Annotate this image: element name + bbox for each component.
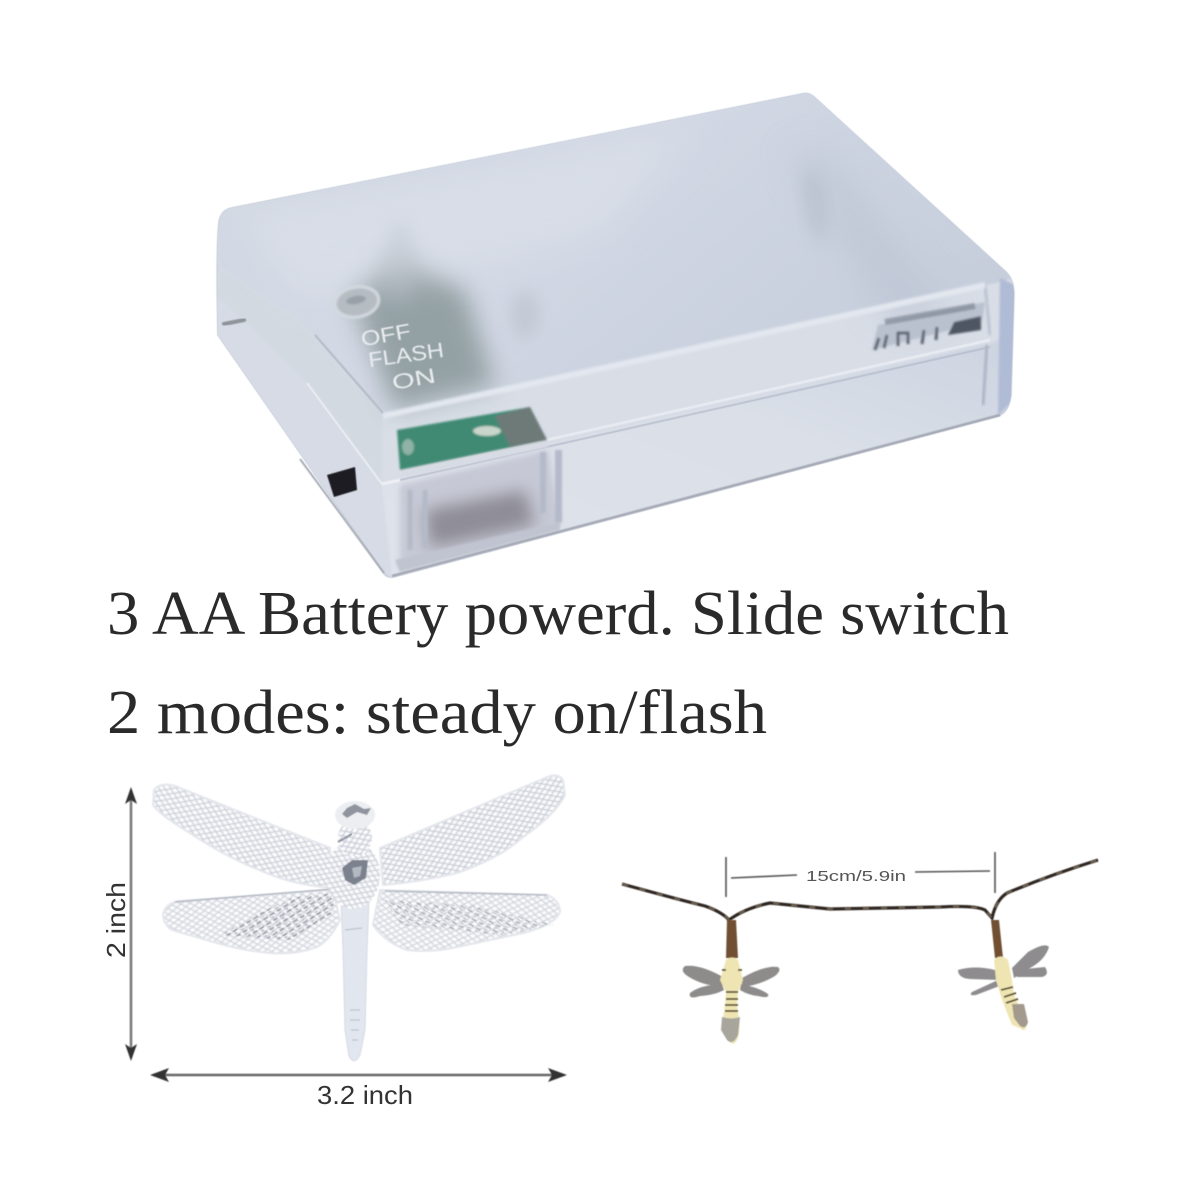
- lit body: [720, 958, 743, 1044]
- wings: [683, 966, 779, 997]
- left dragonfly light: [683, 920, 779, 1044]
- infographic canvas: [106, 92, 1100, 1104]
- lid left band: [218, 269, 219, 295]
- box silhouette: [217, 93, 1014, 577]
- switch labels: OFF: [359, 320, 412, 351]
- battery box photo: [210, 85, 1020, 580]
- label: 3.2 inch: 3.2 inch: [317, 1080, 413, 1110]
- string light spacing diagram: [622, 852, 1098, 1044]
- slide switch: [327, 467, 357, 497]
- arrow: width dimension: [150, 1068, 567, 1082]
- label: 15cm/5.9in: 15cm/5.9in: [806, 868, 906, 885]
- base left side: [210, 290, 392, 580]
- stem: [726, 920, 738, 958]
- dragonfly: body: [326, 801, 380, 1061]
- lid front band: [986, 280, 1012, 287]
- text: battery description line 2: 2 modes: steady on/flash: [107, 679, 767, 747]
- wire: [622, 860, 1098, 920]
- wings: [958, 945, 1049, 995]
- translucent interior shading on lid: [350, 250, 495, 410]
- lid edge highlights: [300, 285, 1000, 576]
- arrow: height dimension: [125, 787, 137, 1061]
- stem: [991, 920, 1003, 958]
- switch labels: [359, 320, 445, 395]
- switch labels: FLASH: [367, 339, 445, 372]
- spacing dimension: [726, 852, 995, 897]
- dragonfly: upper right wing: [380, 775, 565, 885]
- right dragonfly light: [958, 920, 1049, 1030]
- right end cap: [998, 278, 1016, 416]
- wire exit nub: [224, 320, 244, 324]
- text: battery description line 1: 3 AA Battery powerd. Slide switch: [107, 580, 1009, 648]
- dragonfly: lower left wing: [163, 889, 340, 953]
- base front: [382, 335, 1014, 580]
- icon: round LED button: [333, 283, 381, 321]
- shaded window and ribs: [399, 450, 556, 558]
- dragonfly: lower right wing: [373, 890, 560, 951]
- icon: battery contact strip: [872, 302, 985, 350]
- green circuit board: [397, 407, 548, 478]
- dragonfly: upper left wing: [153, 785, 332, 888]
- label: 2 inch: 2 inch: [101, 882, 131, 958]
- lit body: [994, 956, 1026, 1030]
- switch labels: ON: [390, 364, 438, 395]
- lid top face: [218, 94, 1010, 380]
- dragonfly size diagram: [101, 775, 567, 1110]
- box faces: [210, 85, 1020, 580]
